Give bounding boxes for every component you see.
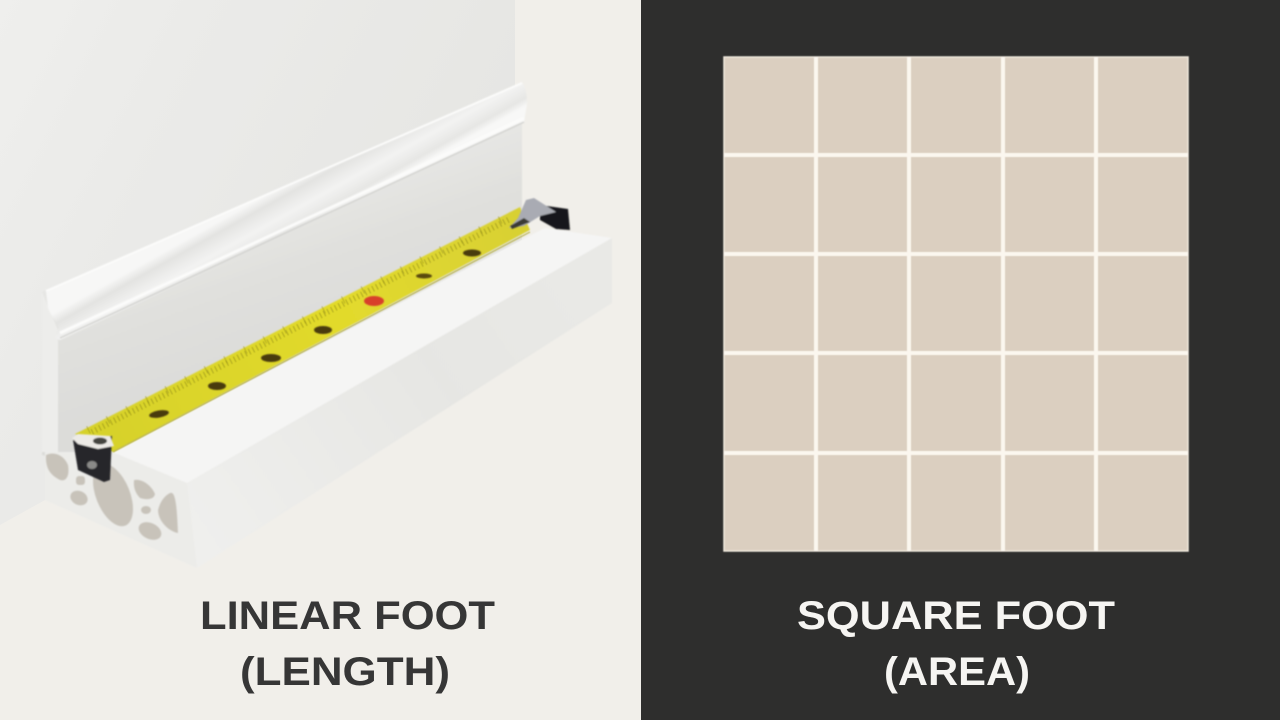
panel: linear foot [0,0,641,720]
tile grid [724,57,1188,551]
sill end profile [45,452,197,568]
sill front face [187,238,612,568]
heading: linear foot [200,594,495,694]
sill top face [112,228,612,483]
tape end hook [72,434,114,482]
baseboard illustration [42,82,612,568]
panel: square foot [641,0,1280,720]
measuring tape [72,198,570,482]
tape number marks [149,250,481,419]
heading: square foot: (AREA) [884,650,1030,694]
tape blade [75,207,530,452]
tape case clip [509,198,570,230]
baseboard face [42,84,522,460]
profile holes [46,453,178,543]
heading: linear foot: (LENGTH) [240,650,450,694]
heading: square foot: SQUARE FOOT [797,594,1115,638]
heading: square foot [797,594,1115,694]
tape ticks [88,216,510,432]
heading: linear foot: LINEAR FOOT [200,594,495,638]
back wall [0,0,522,525]
moulding profile [46,82,527,340]
